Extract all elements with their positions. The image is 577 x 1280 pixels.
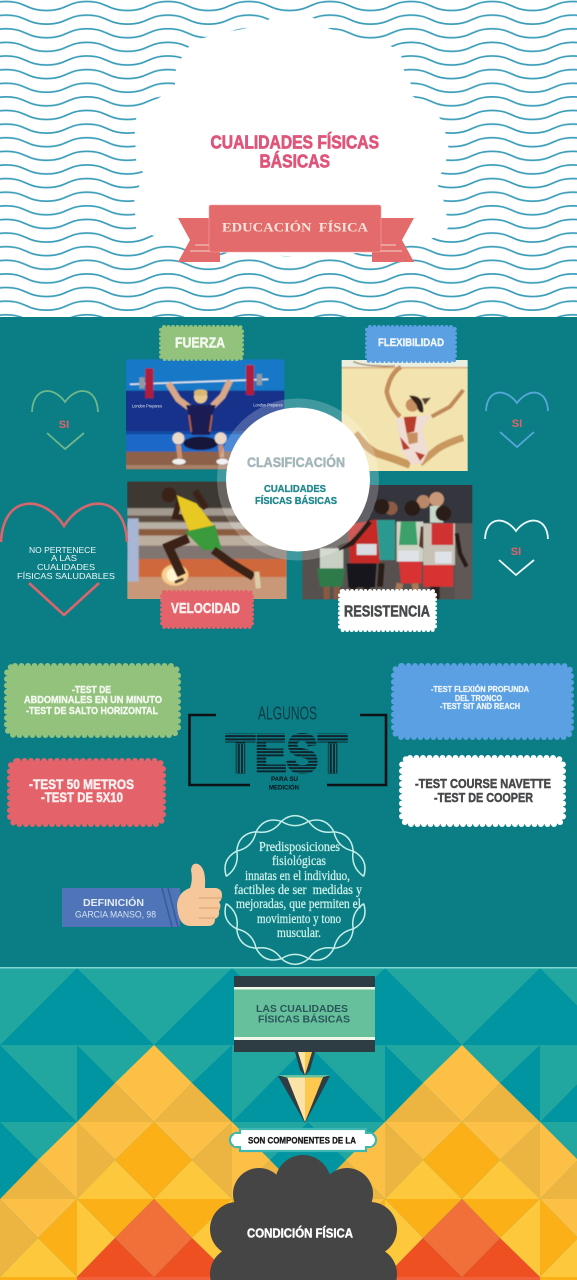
heart: white si [485,521,548,575]
definition band: DEFINICIÓN [83,896,144,909]
box: las cualidades físicas básicas [234,976,375,1052]
definition text: factibles de ser medidas y [234,882,362,897]
panel: triangle pattern background [0,967,577,1280]
heart: blue si: SI [512,418,522,430]
test box: white: -TEST COURSE NAVETTE [415,776,551,791]
panel: header with waves [0,0,577,318]
test box: white: -TEST DE COOPER [434,790,533,805]
central circle: clasificación: FÍSICAS BÁSICAS [255,494,337,507]
photo: weightlifter [123,357,287,472]
heading: algunos test: ALGUNOS [258,704,317,724]
title: CUALIDADES FÍSICAS [210,132,379,152]
central circle: clasificación [222,403,374,556]
heart: red, not included: CUALIDADES [37,563,96,572]
photo: weightlifter: London Prepares [132,403,162,409]
pill: son componentes de la: SON COMPONENTES DE LA [248,1136,356,1146]
box: las cualidades físicas básicas: LAS CUALIDADES [256,1003,348,1015]
label: fuerza [161,327,242,359]
heart: red, not included: FÍSICAS SALUDABLES [17,571,116,581]
photo: sprinter [125,480,288,600]
heading: algunos test: TEST [226,724,347,784]
cloud: condición física [210,1155,397,1280]
label: velocidad [162,592,252,627]
label: velocidad: VELOCIDAD [171,601,240,617]
heart: red, not included [1,504,127,615]
photo: runners [300,483,475,602]
ribbon: educación física [178,205,414,262]
icon: thumbs up [177,864,222,926]
heart: red, not included: NO PERTENECE [29,546,97,555]
definition text: innatas en el individuo, [245,868,350,883]
test box: red: -TEST 50 METROS [29,777,134,792]
heart: blue si [486,393,548,447]
test box: blue [394,666,571,737]
label: flexibilidad [367,327,455,361]
test box: green: -TEST DE SALTO HORIZONTAL [26,705,158,717]
heading: algunos test: MEDICIÓN [269,784,299,792]
label: flexibilidad: FLEXIBILIDAD [378,337,444,349]
title: BÁSICAS [260,150,330,172]
title [210,132,379,172]
white blob behind title [134,14,449,257]
test box: red [10,761,163,824]
pill: son componentes de la [230,1129,376,1151]
ribbon: educación física: EDUCACIÓN FÍSICA [222,220,369,234]
test box: green: -TEST DE [72,684,111,696]
test box: blue: -TEST FLEXIÓN PROFUNDA [431,683,529,694]
photo: gymnast [338,358,472,473]
cloud: condición física: CONDICIÓN FÍSICA [247,1226,353,1240]
heading: algunos test [190,704,386,792]
test box: red: -TEST DE 5X10 [41,790,123,805]
heading: algunos test: PARA SU [271,777,298,783]
label: fuerza: FUERZA [175,334,225,352]
definition band: GARCIA MANSO, 98 [75,910,156,920]
definition band [62,888,180,927]
heart: green si [32,391,98,449]
panel: classification and tests background [0,317,577,968]
definition text: muscular. [277,925,321,940]
test box: blue: DEL TRONCO [455,693,502,703]
definition text: Predisposiciones [259,839,340,854]
label: resistencia: RESISTENCIA [344,604,430,620]
central circle: clasificación: CLASIFICACIÓN [247,453,345,470]
definition ring [221,816,369,964]
test box: white [402,758,563,824]
photo: weightlifter: London Prepares [253,403,283,409]
test box: green [7,666,178,735]
test box: green: ABDOMINALES EN UN MINUTO [24,694,162,706]
definition text: mejoradas, que permiten el [236,896,361,911]
heart: white si: SI [511,546,521,558]
central circle: clasificación: CUALIDADES [264,483,326,495]
heart: green si: SI [59,419,69,431]
definition text: fisiológicas [272,853,326,868]
label: resistencia [340,591,435,630]
definition text: movimiento y tono [257,911,341,926]
arrow: down [278,1052,330,1123]
box: las cualidades físicas básicas: FÍSICAS BÁSICAS [258,1012,350,1026]
definition text [234,839,362,940]
test box: blue: -TEST SIT AND REACH [440,701,520,711]
heart: red, not included: A LAS [51,554,78,563]
